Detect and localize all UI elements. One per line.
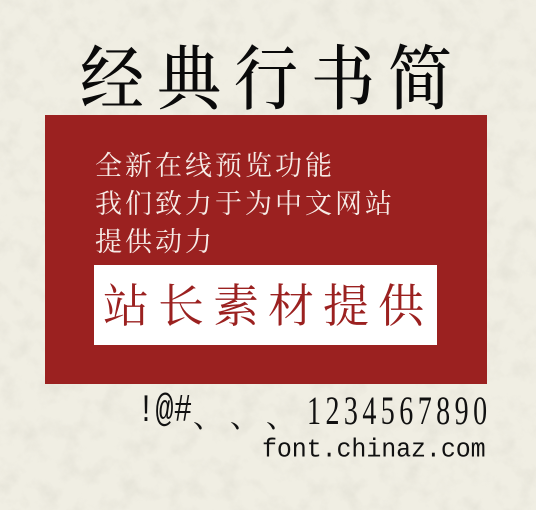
sample glyphs and numbers [137,388,492,436]
website address: font.chinaz.com [262,434,486,465]
white banner [94,265,437,345]
text block: intro lines: 提供动力 [95,220,215,259]
title: 经典行书简 [80,23,465,125]
text block: intro lines [95,144,395,259]
digits: 1234567890 [307,388,492,433]
ideographic commas: 、 [193,392,223,436]
ideographic commas: 、 [266,392,296,436]
banner text: 站长素材提供 [103,270,433,336]
text block: intro lines: 我们致力于为中文网站 [95,182,395,221]
panel: red board [45,115,487,384]
text block: intro lines: 全新在线预览功能 [95,144,335,183]
ideographic commas: 、 [230,392,260,436]
ideographic commas [193,392,296,436]
punctuation sample: !@# [137,390,193,434]
